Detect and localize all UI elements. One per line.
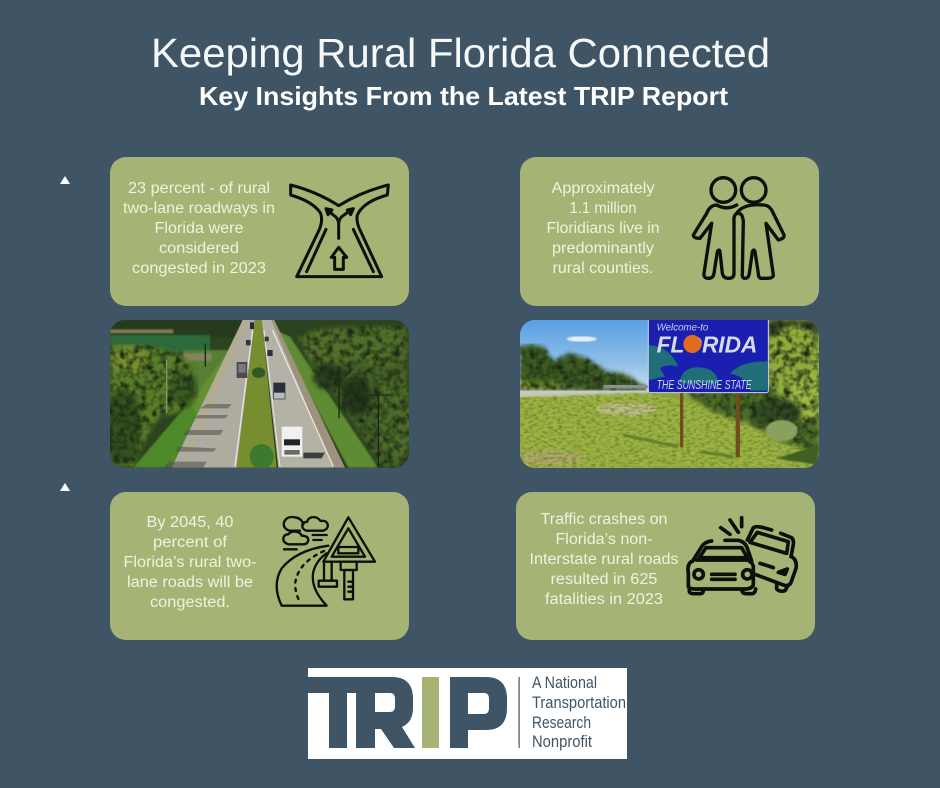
sign posts [680, 393, 683, 447]
card text: By 2045, 40 [146, 514, 234, 531]
photo: rural divided highway [105, 320, 413, 469]
logo divider [518, 677, 520, 748]
card background [520, 157, 819, 306]
title: Keeping Rural Florida Connected [151, 30, 770, 76]
logo tagline: A National [532, 674, 597, 692]
road shadows [163, 404, 232, 468]
logo tagline: Nonprofit [532, 733, 592, 751]
overpass and road [603, 385, 648, 388]
panel: 2045 projection [110, 492, 409, 640]
icon: road with warning sign [277, 517, 375, 606]
bullet marker [60, 176, 70, 184]
trucks [237, 362, 247, 378]
card text: two-lane roadways in [123, 200, 275, 217]
card text [546, 180, 660, 277]
photo: welcome to Florida sign: Welcome-to [657, 322, 709, 333]
card text: resulted in 625 [550, 571, 658, 588]
card text: fatalities in 2023 [545, 591, 663, 608]
card text: lane roads will be [127, 574, 253, 591]
card text: Interstate rural roads [530, 551, 679, 568]
card text: 23 percent - of rural [128, 180, 270, 197]
card text: predominantly [552, 240, 654, 257]
logo letters T and R [308, 677, 415, 748]
logo letter P [450, 677, 507, 748]
card text: Florida were [154, 220, 244, 237]
icon: car crash [688, 518, 796, 594]
median bushes [252, 367, 265, 378]
icon: two people [693, 178, 784, 278]
logo letter I [422, 677, 439, 748]
card text [530, 511, 679, 608]
subtitle: Key Insights From the Latest TRIP Report [199, 81, 728, 111]
logo: TRIP [308, 668, 627, 759]
panel: traffic fatalities [516, 492, 815, 640]
card background [516, 492, 815, 640]
card text: Floridians live in [546, 220, 660, 237]
panel: congested roadways [110, 157, 409, 306]
logo tagline [532, 674, 626, 751]
right roadway [262, 320, 333, 468]
roadside bushes [687, 320, 823, 452]
sky [520, 320, 653, 392]
logo tagline: Transportation [532, 694, 626, 712]
card background [110, 492, 409, 640]
photo: welcome to Florida sign: FLORIDA [657, 331, 757, 357]
logo background [308, 668, 627, 759]
card text: percent of [153, 534, 228, 551]
card text: congested in 2023 [132, 260, 266, 277]
photo: welcome to Florida sign [517, 318, 823, 468]
poles [205, 343, 390, 468]
card text: Florida’s rural two- [124, 554, 256, 571]
bullet marker [60, 483, 70, 491]
tree line [520, 344, 647, 391]
left tree masses [105, 344, 198, 468]
sign board [648, 318, 768, 393]
card text [123, 180, 275, 277]
card background [110, 157, 409, 306]
left roadway [172, 320, 255, 468]
panel: rural population [520, 157, 819, 306]
right tree masses [297, 325, 413, 468]
roadside landscape [110, 320, 378, 468]
post shadows [623, 435, 733, 457]
grass slope [517, 393, 818, 468]
card text: Traffic crashes on [540, 511, 668, 528]
median [237, 320, 277, 468]
card text: congested. [150, 594, 230, 611]
card text: Florida’s non- [556, 531, 652, 548]
card text [124, 514, 256, 611]
photo: welcome to Florida sign: THE SUNSHINE STATE [657, 378, 752, 392]
logo tagline: Research [532, 714, 591, 732]
card text: rural counties. [552, 260, 654, 277]
icon: forked road [291, 185, 388, 277]
card text: Approximately [552, 180, 655, 197]
card text: 1.1 million [570, 200, 636, 217]
card text: considered [159, 240, 239, 257]
